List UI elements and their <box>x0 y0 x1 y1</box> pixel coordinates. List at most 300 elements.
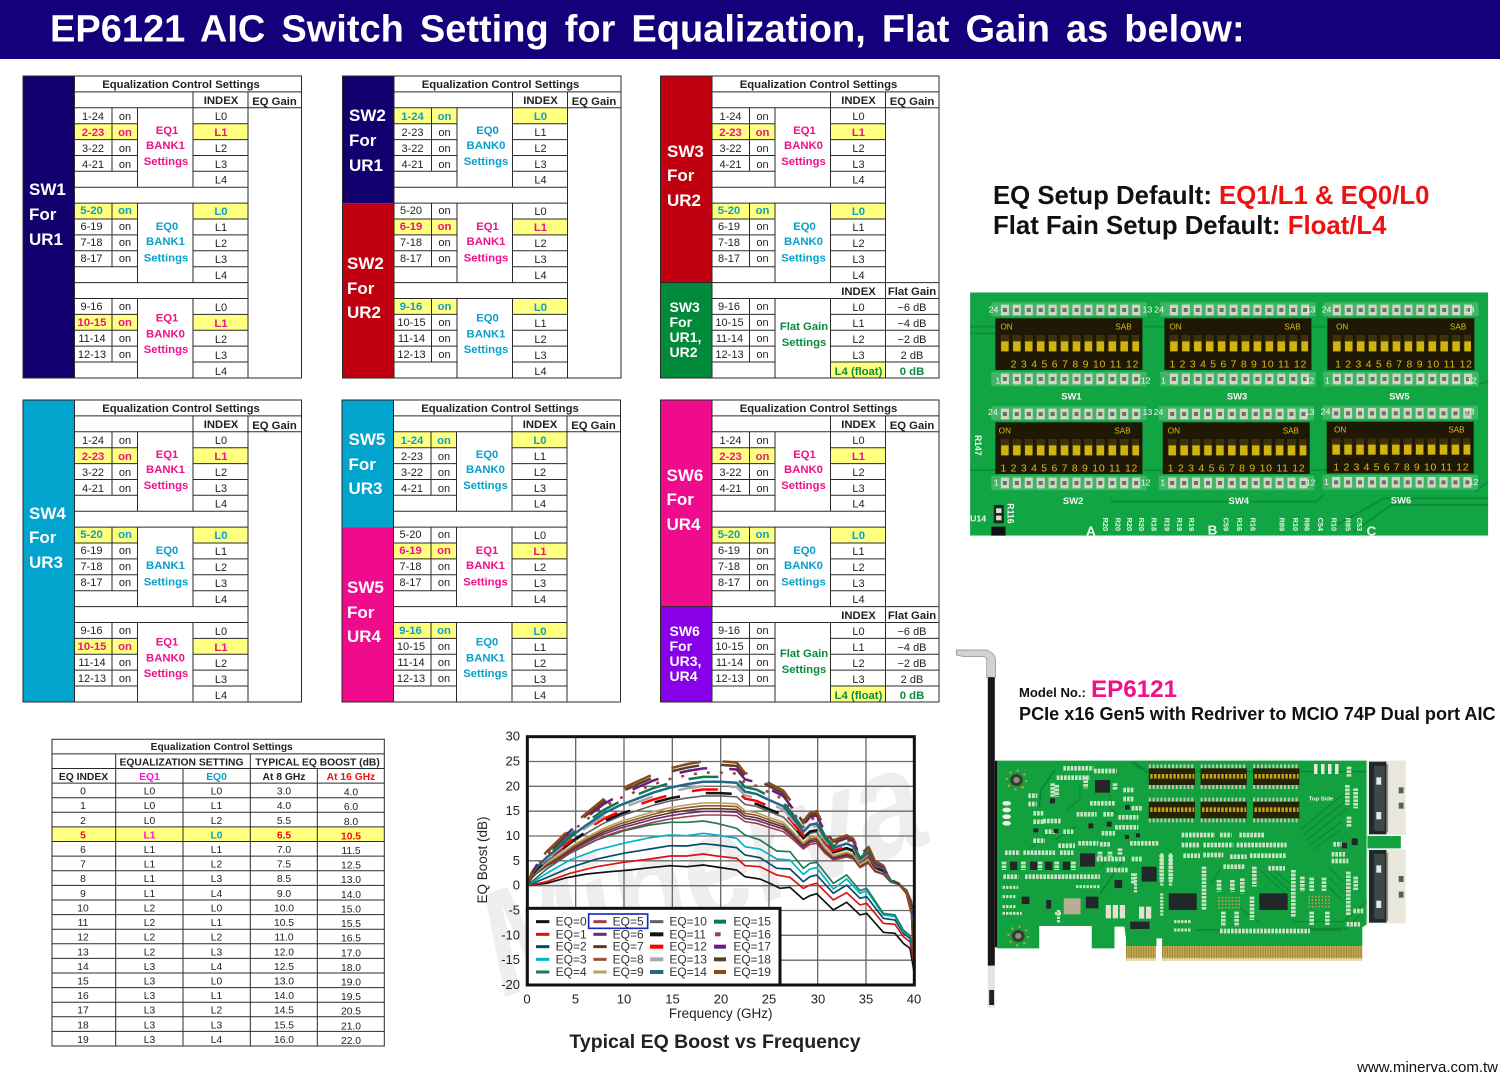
group: EQ0 BANK0: L3 <box>534 159 547 171</box>
group: EQ0 BANK1: 7-18 <box>80 237 103 249</box>
group: EQ0 BANK1: L4 <box>534 690 546 702</box>
table rows: L0 <box>211 904 222 914</box>
group: EQ0 BANK1: L1 <box>215 222 227 234</box>
group: EQ1 BANK0: on <box>756 143 769 155</box>
switch label: SW6 For UR3, UR4: UR3, <box>670 653 701 669</box>
table heading row: INDEX <box>204 419 239 431</box>
chart legend: EQ=15 <box>733 915 771 929</box>
group: EQ1 BANK0: 2-23 <box>719 127 742 139</box>
table heading row: EQ Gain <box>890 96 934 108</box>
table rows: L3 <box>144 1035 155 1046</box>
group: EQ0 BANK1: 6-19 <box>80 221 103 233</box>
table rows: 7 <box>80 860 86 871</box>
table rows: L3 <box>144 1006 155 1017</box>
board silkscreen references: A <box>1086 524 1096 539</box>
switch label: SW2 For UR2 <box>347 254 384 322</box>
board silkscreen references: C <box>1367 524 1377 539</box>
group: EQ1 BANK0: 4-21 <box>719 483 742 495</box>
group: EQ1 BANK0: 1-24 <box>719 435 742 447</box>
table rows: 16 <box>77 991 89 1002</box>
table rows: 7.0 <box>277 845 291 856</box>
board silkscreen references: R20 <box>1137 518 1146 531</box>
y axis ticks: -5 <box>508 902 520 918</box>
table rows: 8.5 <box>277 874 291 885</box>
model description: EP6121 <box>1091 676 1177 703</box>
table rows: 10.5 <box>274 918 294 929</box>
group: EQ1 BANK0: 12-13 <box>78 349 106 361</box>
title banner: EP6121 AIC Switch Setting for Equalization, Flat Gain as below: <box>50 9 1245 51</box>
group: EQ0 BANK1: 7-18 <box>80 561 103 573</box>
switch SW2: 13 <box>1142 407 1152 417</box>
group: EQ1 BANK0: on <box>756 435 769 447</box>
table rows: L1 <box>211 918 222 929</box>
group: EQ1 BANK0: Settings <box>781 480 826 492</box>
group: EQ1 BANK0: on <box>756 111 769 123</box>
group: flat gain settings: −4 dB <box>897 642 927 654</box>
switch SW3: 1 <box>1161 375 1166 385</box>
switch SW3: 13 <box>1306 305 1316 315</box>
table rows: L3 <box>211 874 222 885</box>
group: EQ0 BANK0: L1 <box>534 451 546 463</box>
table rows: 10.5 <box>341 831 361 842</box>
switch SW3: 12 <box>1305 375 1315 385</box>
group: EQ0 BANK0 <box>394 108 568 186</box>
group: EQ1 BANK0: L4 <box>215 366 227 378</box>
group: EQ0 BANK0: L4 <box>534 498 546 510</box>
table rows: 18 <box>77 1020 89 1031</box>
group: EQ1 BANK0: on <box>756 483 769 495</box>
group: EQ0 BANK0: EQ0 <box>476 449 498 461</box>
group: EQ1 BANK1: L3 <box>215 159 227 171</box>
group: flat gain settings: −4 dB <box>897 318 927 330</box>
group: EQ0 BANK0: on <box>438 451 450 463</box>
x axis ticks <box>523 992 921 1007</box>
switch SW4: 12 <box>1306 478 1316 488</box>
table rows: L0 <box>144 787 155 798</box>
group: EQ1 BANK0: L4 <box>215 690 227 702</box>
group: EQ0 BANK1: Settings <box>144 576 188 588</box>
group: EQ1 BANK1: 1-24 <box>82 435 104 447</box>
x axis ticks: 30 <box>811 992 825 1007</box>
switch label: SW3 For UR2 <box>667 142 704 210</box>
group: EQ0 BANK1: EQ0 <box>476 636 498 648</box>
group: flat gain settings: L0 <box>852 626 865 638</box>
table rows: 21.0 <box>341 1021 361 1032</box>
group: EQ0 BANK1: 5-20 <box>80 205 103 217</box>
switch SW2: 1 <box>994 478 999 488</box>
table rows: L1 <box>211 845 222 856</box>
table rows: L3 <box>144 976 155 988</box>
switch SW5: 1 <box>1325 375 1330 385</box>
group: EQ0 BANK0: 5-20 <box>718 529 740 541</box>
switch label: SW2 For UR1: UR1 <box>349 156 383 175</box>
y axis ticks <box>501 729 520 992</box>
group: EQ1 BANK0: 2-23 <box>719 451 742 463</box>
switch SW4 <box>1154 406 1316 506</box>
group: EQ0 BANK1: 12-13 <box>397 349 426 361</box>
group: flat gain settings <box>715 610 936 702</box>
group: EQ1 BANK1: Settings <box>463 576 508 588</box>
board silkscreen references: C54 <box>1316 518 1325 532</box>
group: EQ1 BANK1: BANK1 <box>146 140 185 152</box>
chart legend: EQ=17 <box>733 940 771 954</box>
board silkscreen references: R16 <box>1235 518 1244 531</box>
board silkscreen references: R20 <box>1125 518 1134 531</box>
MCIO connectors <box>1366 761 1406 926</box>
watermark: Minerva: Minerva <box>456 713 946 1028</box>
switch SW1: 1 <box>995 375 1000 385</box>
group: EQ0 BANK1: 9-16 <box>399 625 422 637</box>
panel: SW4 for UR3 settings table <box>23 400 302 702</box>
switch label: SW1 For UR1: UR1 <box>29 230 63 249</box>
switch label: SW3 For UR1, UR2: For <box>670 314 693 330</box>
group: EQ1 BANK1: L1 <box>214 451 228 463</box>
group: EQ0 BANK0: EQ0 <box>476 125 499 137</box>
group: EQ1 BANK1 <box>394 205 568 282</box>
table headings: At 8 GHz <box>263 772 305 783</box>
group: EQ0 BANK0: BANK0 <box>466 464 505 476</box>
switch SW5: 1 2 3 4 5 6 7 8 9 10 11 12 <box>1335 359 1472 370</box>
group: EQ1 BANK1: L2 <box>534 562 546 574</box>
group: flat gain settings: on <box>756 317 769 329</box>
switch label: SW6 For UR4 <box>666 466 703 534</box>
switch label: SW2 For UR2: SW2 <box>347 254 384 273</box>
group: EQ1 BANK0: L3 <box>215 350 227 362</box>
group: EQ1 BANK0: on <box>118 317 132 329</box>
table rows: L0 <box>144 801 155 812</box>
switch label: SW6 For UR3, UR4: UR4 <box>670 668 698 684</box>
y axis label: EQ Boost (dB) <box>475 816 490 904</box>
switch SW2: 12 <box>1141 478 1151 488</box>
group: flat gain settings: on <box>756 625 769 637</box>
group: EQ0 BANK0: on <box>438 483 450 495</box>
group: flat gain settings <box>715 286 936 378</box>
lower-left silkscreen components <box>1002 853 1192 930</box>
group: flat gain settings: 2 dB <box>901 350 923 362</box>
group: EQ0 BANK0: L0 <box>852 206 865 218</box>
switch SW3: SAB <box>1284 322 1301 331</box>
group: flat gain settings: on <box>756 657 769 669</box>
group: EQ1 BANK0: EQ1 <box>793 449 816 461</box>
panel: SW3 for UR2 and flat gain table <box>660 76 939 378</box>
table rows: 5 <box>80 830 86 841</box>
switch SW2: 24 <box>988 407 998 417</box>
group: EQ1 BANK1: EQ1 <box>476 221 499 233</box>
group: EQ1 BANK0: on <box>756 159 769 171</box>
group: EQ1 BANK1: on <box>119 143 131 155</box>
board silkscreen references: B <box>1208 522 1218 537</box>
group: EQ0 BANK0: on <box>437 435 451 447</box>
x axis ticks: 10 <box>617 992 631 1007</box>
group: EQ1 BANK0: L0 <box>852 435 865 447</box>
table rows: 16.5 <box>341 934 361 945</box>
board silkscreen references: R19 <box>1175 518 1184 531</box>
table rows: 11 <box>78 918 89 929</box>
board silkscreen references <box>970 435 1377 539</box>
group: EQ0 BANK1: 8-17 <box>80 253 103 265</box>
table rows: 19 <box>77 1035 89 1046</box>
group: EQ0 BANK0: on <box>756 253 769 265</box>
group: EQ1 BANK0: L4 <box>852 498 865 510</box>
group: EQ1 BANK1: 8-17 <box>399 577 422 589</box>
group: EQ1 BANK1: L4 <box>215 498 227 510</box>
x axis ticks: 5 <box>572 992 579 1007</box>
group: flat gain settings: 9-16 <box>718 625 740 637</box>
table rows: L2 <box>211 933 222 944</box>
table rows: 19.5 <box>341 992 361 1003</box>
group: EQ0 BANK1: on <box>119 221 131 233</box>
chart legend: EQ=3 <box>556 952 587 966</box>
board silkscreen references: R85 <box>1343 518 1352 531</box>
group: EQ1 BANK0: on <box>119 349 131 361</box>
panel: SW5 for UR3 and UR4 settings table <box>342 400 620 702</box>
group: EQ0 BANK1: on <box>119 237 131 249</box>
group: EQ0 BANK0: 3-22 <box>401 143 424 155</box>
y axis ticks: 20 <box>506 778 520 793</box>
y axis ticks: 25 <box>506 754 520 768</box>
group: EQ1 BANK0: Settings <box>144 344 188 356</box>
table rows: 9 <box>80 889 86 900</box>
chart legend: EQ=1 <box>556 927 587 941</box>
table rows: L3 <box>144 962 155 973</box>
table heading row <box>740 403 934 432</box>
group: EQ0 BANK0: 1-24 <box>401 435 424 447</box>
group: EQ1 BANK0: L3 <box>852 483 865 495</box>
table headings: EQ0 <box>206 772 227 783</box>
table rows: 13.0 <box>274 976 294 988</box>
table rows: 14.0 <box>274 991 294 1002</box>
switch label: SW3 For UR2: SW3 <box>667 142 704 161</box>
group: EQ0 BANK1: L0 <box>534 302 547 314</box>
switch SW4: 1 <box>1160 478 1165 488</box>
group: EQ1 BANK0: L2 <box>852 143 865 155</box>
group: EQ0 BANK1: EQ0 <box>156 221 178 233</box>
table rows: 8 <box>80 874 86 885</box>
panel: SW6 for UR4 and flat gain table <box>660 400 939 702</box>
table rows: 6 <box>80 845 86 856</box>
table headings: EQ1 <box>139 772 160 783</box>
chart legend: EQ=5 <box>613 915 644 929</box>
table headings: At 16 GHz <box>327 772 375 783</box>
switch SW6: ON <box>1334 426 1346 435</box>
group: EQ0 BANK0: on <box>756 561 769 573</box>
table heading row: Equalization Control Settings <box>421 403 579 415</box>
table rows: 12.5 <box>341 861 361 872</box>
group: EQ0 BANK0: on <box>756 237 769 249</box>
group: flat gain settings: on <box>756 349 769 361</box>
switch SW1: SAB <box>1115 322 1132 331</box>
group: EQ1 BANK1: on <box>437 545 451 557</box>
group: EQ1 BANK1: L0 <box>534 530 546 542</box>
group: flat gain settings: on <box>756 673 769 685</box>
table rows: 4.0 <box>277 801 291 812</box>
group: EQ1 BANK1: 4-21 <box>82 483 104 495</box>
group: flat gain settings: L0 <box>852 302 865 314</box>
switch SW1: 24 <box>989 305 999 315</box>
chart legend: EQ=18 <box>733 952 771 966</box>
group: EQ0 BANK0: BANK0 <box>784 560 823 572</box>
group: EQ0 BANK0: 4-21 <box>401 483 423 495</box>
group: EQ0 BANK0: Settings <box>464 156 508 168</box>
group: EQ0 BANK0: on <box>438 159 451 171</box>
group: EQ1 BANK1: L1 <box>533 546 547 558</box>
group: EQ1 BANK0: Settings <box>144 668 188 680</box>
group: EQ0 BANK1: on <box>437 625 451 637</box>
group: EQ0 BANK1: L4 <box>534 366 547 378</box>
table heading row <box>421 403 616 432</box>
group: flat gain settings: Settings <box>782 337 826 349</box>
table rows <box>77 787 361 1047</box>
group: EQ0 BANK0: 1-24 <box>401 111 425 123</box>
y axis ticks: 30 <box>506 729 520 744</box>
switch SW2 <box>988 406 1152 506</box>
y axis ticks: 15 <box>506 803 520 818</box>
table heading row: Equalization Control Settings <box>102 79 260 91</box>
table rows: 8.0 <box>344 817 358 828</box>
switch label: SW4 For UR3: SW4 <box>29 504 66 523</box>
group: EQ0 BANK1: on <box>438 317 451 329</box>
group: EQ1 BANK1: 3-22 <box>82 467 104 479</box>
x axis ticks: 0 <box>523 992 531 1007</box>
group: EQ1 BANK1: Settings <box>144 480 188 492</box>
switch SW6 <box>1321 406 1479 505</box>
table rows: L2 <box>144 933 155 944</box>
switch label: SW3 For UR1, UR2 <box>670 299 701 360</box>
table rows: 12.5 <box>274 962 294 973</box>
table heading row: INDEX <box>523 419 558 431</box>
table rows: L0 <box>211 976 222 988</box>
switch label: SW4 For UR3 <box>29 504 66 572</box>
group: EQ1 BANK1: BANK1 <box>146 464 185 476</box>
board silkscreen references: R16 <box>1249 518 1258 531</box>
switch label: SW2 For UR2: For <box>347 279 375 298</box>
table rows: 6.5 <box>277 830 291 841</box>
group: flat gain settings: 0 dB <box>900 690 924 702</box>
table heading row <box>102 403 297 432</box>
group: EQ0 BANK1: 11-14 <box>398 333 425 345</box>
chart legend: EQ=19 <box>733 965 771 979</box>
chart legend: EQ=16 <box>733 927 771 941</box>
group: EQ0 BANK1: L2 <box>215 562 227 574</box>
table rows: L1 <box>144 860 155 871</box>
group: flat gain settings: −6 dB <box>897 626 927 638</box>
group: flat gain settings: INDEX <box>841 286 876 298</box>
group: EQ1 BANK1: on <box>119 435 131 447</box>
group: flat gain settings: 12-13 <box>715 673 744 685</box>
switch SW2: 1 2 3 4 5 6 7 8 9 10 11 12 <box>1000 463 1138 474</box>
group: EQ1 BANK1: on <box>118 127 132 139</box>
group: EQ1 BANK0: L3 <box>852 159 865 171</box>
group: EQ1 BANK0: on <box>119 673 131 685</box>
table heading row: Equalization Control Settings <box>102 403 260 415</box>
table rows: 9.0 <box>277 889 291 900</box>
group: EQ1 BANK0: EQ1 <box>156 636 178 648</box>
table rows: L0 <box>144 816 155 827</box>
board outline <box>997 761 1401 948</box>
group: flat gain settings: Flat Gain <box>888 286 936 298</box>
group: EQ0 BANK0: 7-18 <box>718 561 740 573</box>
table rows: 10.0 <box>274 904 294 914</box>
group: EQ1 BANK0: Settings <box>781 156 826 168</box>
model description <box>1019 676 1496 724</box>
group: EQ0 BANK1: 10-15 <box>397 641 425 653</box>
group: EQ1 BANK1: on <box>119 483 131 495</box>
table rows: 15 <box>77 976 89 988</box>
switch SW5: 13 <box>1465 305 1474 315</box>
group: EQ0 BANK1: Settings <box>144 252 188 264</box>
group: EQ1 BANK1: on <box>438 529 450 541</box>
group: flat gain settings: Flat Gain <box>888 610 936 622</box>
group: EQ0 BANK0: L2 <box>852 562 865 574</box>
group: EQ0 BANK0: on <box>756 529 769 541</box>
table rows: L3 <box>144 991 155 1002</box>
group: EQ0 BANK0: on <box>438 467 450 479</box>
switch SW5: ON <box>1336 322 1348 331</box>
group: flat gain settings: L3 <box>852 674 865 686</box>
group: EQ0 BANK1: L1 <box>534 642 546 654</box>
switch label: SW3 For UR1, UR2: UR1, <box>670 329 701 345</box>
gold edge fingers <box>1126 946 1362 961</box>
x axis label: Frequency (GHz) <box>669 1006 772 1021</box>
group: EQ0 BANK1: L2 <box>534 658 546 670</box>
left board detail <box>1002 762 1200 883</box>
group: EQ1 BANK0: on <box>756 451 769 463</box>
table rows: 18.0 <box>341 963 361 974</box>
group: EQ0 BANK1: L4 <box>215 594 227 606</box>
group: flat gain settings: on <box>756 641 769 653</box>
group: EQ0 BANK1: on <box>438 333 451 345</box>
group: EQ0 BANK0: L4 <box>852 270 865 282</box>
switch label: SW5 For UR3 <box>348 430 385 498</box>
chart title: Typical EQ Boost vs Frequency <box>569 1031 861 1053</box>
group: EQ1 BANK1: L3 <box>534 578 546 590</box>
table rows: 19.0 <box>341 978 361 988</box>
board silkscreen references: R20 <box>1101 518 1110 531</box>
group: EQ1 BANK0: 3-22 <box>719 467 742 479</box>
group: EQ0 BANK1 <box>394 622 567 702</box>
switch label: SW4 For UR3: For <box>29 528 57 547</box>
x axis ticks: 35 <box>859 992 873 1007</box>
switch label: SW3 For UR1, UR2: SW3 <box>670 299 700 315</box>
chart legend: EQ=6 <box>613 927 644 941</box>
switch label: SW6 For UR4: For <box>666 490 694 509</box>
switch SW5: SW5 <box>1389 390 1410 401</box>
group: EQ0 BANK0: 4-21 <box>401 159 424 171</box>
group: flat gain settings: 11-14 <box>716 333 743 345</box>
group: flat gain settings: on <box>756 301 769 313</box>
table rows: L2 <box>144 918 155 929</box>
board silkscreen references: R147 <box>973 435 983 456</box>
group: EQ0 BANK0: L2 <box>534 467 546 479</box>
group: EQ1 BANK1: 3-22 <box>82 143 104 155</box>
table rows: L1 <box>144 889 155 900</box>
group: EQ1 BANK1: on <box>438 253 451 265</box>
switch label: SW6 For UR3, UR4: For <box>670 638 693 654</box>
group: EQ0 BANK1: L3 <box>215 254 227 266</box>
group: EQ0 BANK0: L1 <box>852 546 865 558</box>
table rows: 1 <box>80 801 86 812</box>
group: EQ1 BANK0: 1-24 <box>719 111 742 123</box>
group: EQ0 BANK1: on <box>119 577 131 589</box>
x axis ticks: 20 <box>714 992 728 1007</box>
group: EQ1 BANK0: L2 <box>852 467 865 479</box>
group: EQ0 BANK0: on <box>438 143 451 155</box>
table rows: L2 <box>211 860 222 871</box>
group: EQ1 BANK0: L1 <box>852 451 865 463</box>
table rows: 20.5 <box>341 1007 361 1018</box>
table rows: L2 <box>144 947 155 958</box>
right board detail <box>1200 767 1367 931</box>
